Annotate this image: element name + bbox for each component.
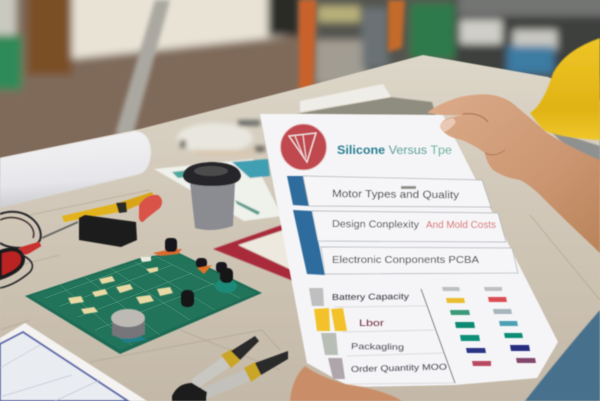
white paper roll xyxy=(0,131,151,208)
left band: design and electronics rows xyxy=(293,210,325,275)
row: design complexity and mold costs: And Mold Costs xyxy=(426,220,496,231)
blurred clutter behind sheet xyxy=(177,120,265,155)
cost table: labels and swatches xyxy=(309,288,456,384)
yellow hard hat xyxy=(530,38,600,140)
wood plank seams xyxy=(0,190,600,401)
row: electronic components PCBA xyxy=(321,247,518,274)
cost table: labels and swatches: Battery Capacity xyxy=(332,291,410,302)
infographic sheet xyxy=(260,114,558,387)
cost table: labels and swatches: Order Quantity MOO xyxy=(351,361,447,374)
cost table: right colour bars xyxy=(484,287,536,363)
row: motor types and quality xyxy=(287,176,491,207)
board gold pads xyxy=(68,256,173,314)
blurred workshop background xyxy=(0,0,600,180)
silver connectors with black tips xyxy=(172,336,288,401)
sheet title: Silicone Versus Tpe xyxy=(337,145,452,157)
logo badge xyxy=(280,124,326,170)
row: design complexity and mold costs: Design Conplexity xyxy=(332,219,419,231)
red folder with white sheet xyxy=(213,220,296,282)
right hand holding sheet xyxy=(428,94,600,253)
sheet paper xyxy=(260,114,558,387)
cables and red meter xyxy=(0,212,78,288)
rolled paper in background xyxy=(300,84,391,112)
board components xyxy=(111,238,237,343)
yellow and red screwdriver xyxy=(62,192,162,222)
grey tray behind sheet xyxy=(296,97,436,116)
orange posts and grey pole xyxy=(115,0,405,135)
cost table: labels and swatches: Packagling xyxy=(351,341,404,352)
left hand at bottom of sheet xyxy=(290,366,402,401)
cost table: left colour bars xyxy=(442,287,491,366)
row: motor types and quality: Motor Types and Quality xyxy=(332,188,460,201)
cost table: labels and swatches: Lbor xyxy=(359,318,384,328)
row: electronic components PCBA: Electronic Conponents PCBA xyxy=(332,254,479,266)
row: design complexity and mold costs xyxy=(312,211,506,242)
green circuit board xyxy=(25,238,262,354)
document behind cup xyxy=(154,159,282,221)
black connector box xyxy=(79,215,137,247)
grey cup with black lid xyxy=(183,162,241,230)
blue sleeve xyxy=(525,310,600,401)
bottom-left planning sheet xyxy=(0,323,147,401)
silver band under hard hat xyxy=(550,130,600,162)
